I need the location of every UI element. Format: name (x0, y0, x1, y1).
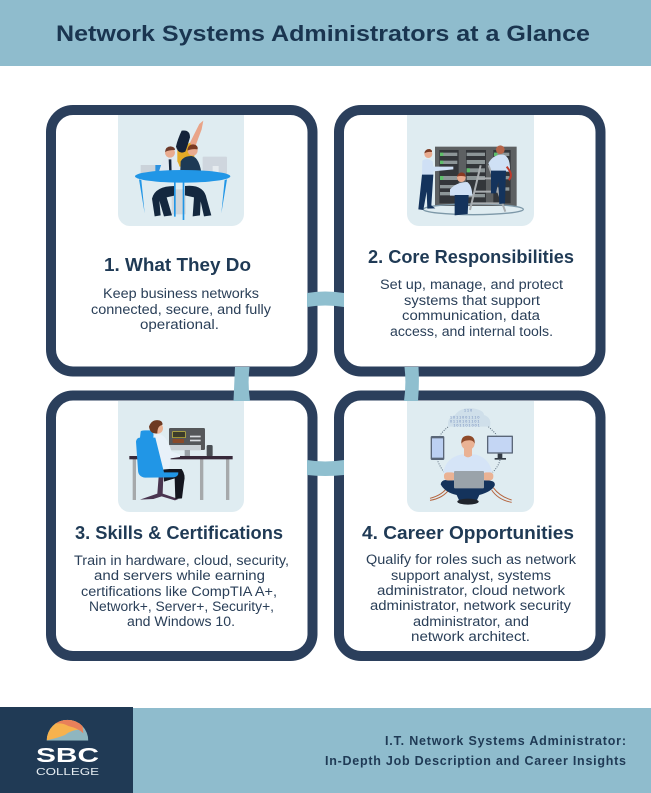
text block: administrator, cloud network (377, 583, 565, 598)
text block: Keep business networks (103, 286, 259, 301)
text block (380, 277, 563, 339)
text block (74, 553, 289, 629)
footer banner (0, 707, 651, 793)
illustration: person with laptop and devices: 0 1 1 0 1 0 1 1 0 1 (450, 419, 479, 423)
logo: SBC College: COLLEGE (36, 767, 99, 778)
text block: and servers while earning (94, 568, 265, 583)
heading: 2. Core Responsibilities (368, 246, 574, 267)
text block: and Windows 10. (127, 614, 235, 629)
text block: Train in hardware, cloud, security, (74, 553, 289, 568)
illustration: server rack technicians (407, 115, 534, 226)
logo: SBC College (36, 718, 99, 778)
footer text: I.T. Network Systems Administrator: (385, 734, 626, 748)
heading: 4. Career Opportunities (362, 522, 574, 543)
text block: administrator, network security (370, 598, 571, 613)
text block: administrator, and (413, 614, 529, 629)
text block: access, and internal tools. (390, 324, 553, 339)
text block (91, 286, 271, 332)
text block: connected, secure, and fully (91, 302, 271, 317)
illustration: person at desk (118, 401, 244, 512)
text block: Set up, manage, and protect (380, 277, 563, 292)
panel: what they do (51, 110, 312, 372)
header banner (0, 0, 651, 66)
illustration: person with laptop and devices: 1 0 1 1 0 1 0 0 1 (453, 423, 480, 427)
connector: left vertical (234, 367, 250, 401)
panel: skills and certifications (51, 396, 312, 656)
text block: operational. (140, 317, 219, 332)
connector: top horizontal (307, 292, 344, 307)
text block: systems that support (404, 293, 540, 308)
text block: certifications like CompTIA A+, (81, 584, 277, 599)
title: Network Systems Administrators at a Glance (56, 21, 590, 46)
text block (366, 552, 576, 644)
illustration: person with laptop and devices: 1 1 0 (464, 409, 472, 413)
footer text (325, 734, 626, 768)
footer text: In-Depth Job Description and Career Insights (325, 754, 626, 768)
illustration: person with laptop and devices: 1 0 1 1 0 0 1 1 1 0 (450, 415, 479, 419)
text block: network architect. (411, 629, 530, 644)
text block: Qualify for roles such as network (366, 552, 576, 567)
panel: career opportunities (339, 396, 600, 656)
heading: 3. Skills & Certifications (75, 522, 283, 543)
panel: core responsibilities (339, 110, 600, 372)
text block: Network+, Server+, Security+, (89, 599, 274, 614)
connector: bottom horizontal (307, 460, 344, 476)
text block: support analyst, systems (391, 568, 551, 583)
illustration: team at table (118, 115, 244, 226)
heading: 1. What They Do (104, 254, 251, 275)
text block: communication, data (402, 308, 541, 323)
logo: SBC College: SBC (36, 745, 99, 767)
illustration: person with laptop and devices (407, 401, 534, 512)
connector: right vertical (404, 367, 419, 401)
